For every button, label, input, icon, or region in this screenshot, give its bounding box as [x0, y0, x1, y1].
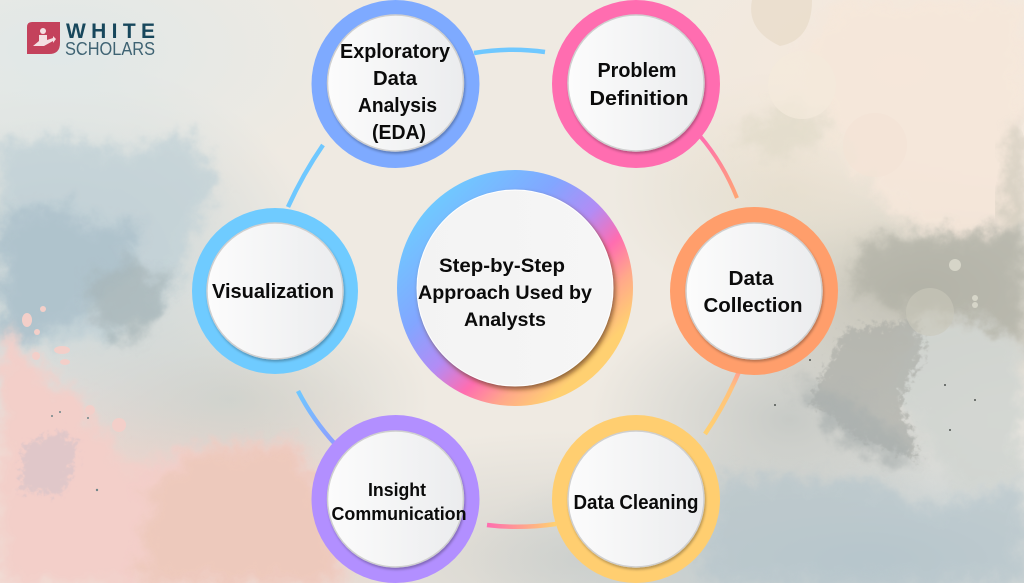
label: [340, 40, 451, 144]
label: Problem: [598, 59, 676, 82]
central node: Step-by-Step Approach: [397, 170, 633, 406]
connector: Data Collection to Data Cleaning: [705, 362, 743, 434]
node: Exploratory Data Analysis: [312, 0, 480, 168]
logo wordmark: [65, 20, 155, 59]
label: [704, 267, 802, 317]
label: Analysis: [358, 94, 437, 117]
label: Data: [728, 267, 774, 290]
central title: Step-by-Step: [439, 255, 565, 277]
label: Insight: [368, 479, 426, 500]
label: Exploratory: [340, 40, 451, 63]
central title: Approach Used by: [418, 282, 592, 304]
label: Collection: [704, 294, 802, 317]
node: Visualization: [192, 208, 358, 374]
central title: [418, 255, 592, 331]
connector: Visualization to EDA: [288, 145, 323, 207]
label: [590, 59, 688, 110]
logo wordmark: SCHOLARS: [65, 39, 155, 59]
connector: Visualization to Insight Communication: [298, 391, 335, 444]
central title: Analysts: [464, 309, 546, 331]
label: Data Cleaning: [574, 491, 698, 514]
node: Problem Definition: [552, 0, 720, 168]
node: Data Cleaning: [552, 415, 720, 583]
label: [332, 479, 466, 524]
logo icon: [27, 22, 60, 54]
node: Insight Communication: [312, 415, 480, 583]
label: Definition: [590, 87, 688, 110]
label: (EDA): [372, 121, 426, 144]
label: Data: [373, 67, 418, 90]
label: Visualization: [212, 280, 334, 303]
connector: EDA to Problem Definition: [474, 50, 545, 53]
logo wordmark: WHITE: [66, 20, 155, 43]
node: Data Collection: [670, 207, 838, 375]
connector: Insight Communication to Data Cleaning: [487, 524, 556, 527]
logo: White Scholars: [27, 20, 155, 59]
label: Communication: [332, 503, 466, 524]
connector: Problem Definition to Data Collection: [700, 136, 737, 198]
